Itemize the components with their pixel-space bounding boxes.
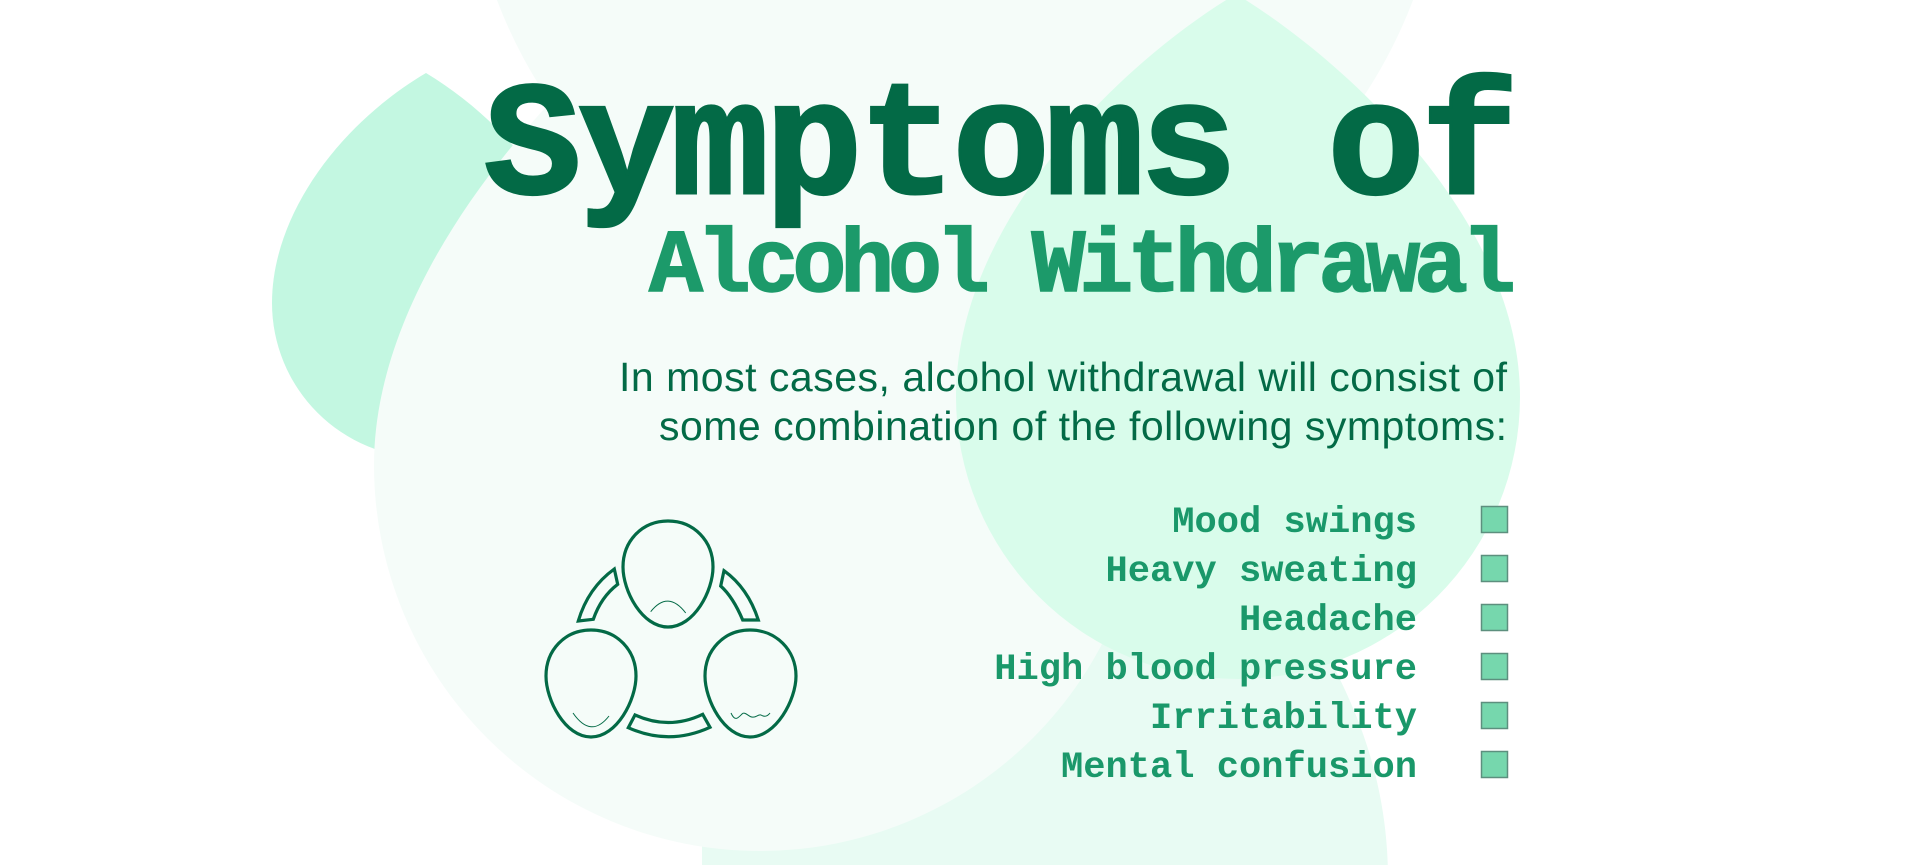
symptoms list text: [994, 502, 1417, 789]
icon: top face with frown: [623, 521, 713, 627]
intro text: In most cases, alcohol withdrawal will consist of: [619, 354, 1508, 400]
icon: left arc arrow: [578, 569, 618, 621]
background: left mint drop: [272, 73, 582, 458]
icon: three faces in a cycle: [546, 521, 796, 737]
intro text: [619, 354, 1508, 449]
background: lower drop: [702, 450, 1388, 865]
icon: bottom arc arrow: [628, 714, 710, 737]
checkboxes: [1482, 506, 1508, 778]
icon: right face with wavy mouth: [705, 630, 796, 737]
background: right mint drop: [956, 0, 1520, 679]
background: large pale drop: [374, 0, 1146, 851]
icon: left face with smile: [546, 630, 636, 737]
symptoms list text: Irritability: [1150, 698, 1417, 740]
title: Symptoms of: Symptoms of: [484, 58, 1515, 242]
symptoms list text: Mental confusion: [1061, 747, 1417, 789]
subtitle: Alcohol Withdrawal: Alcohol Withdrawal: [649, 217, 1513, 319]
symptoms list text: Mood swings: [1172, 502, 1417, 544]
intro text: some combination of the following symptoms:: [659, 403, 1507, 449]
symptoms list text: High blood pressure: [994, 649, 1417, 691]
symptoms list text: Heavy sweating: [1105, 551, 1417, 593]
symptoms list text: Headache: [1239, 600, 1417, 642]
background: top pale circle: [465, 0, 1445, 316]
icon: right arc arrow: [721, 571, 758, 620]
